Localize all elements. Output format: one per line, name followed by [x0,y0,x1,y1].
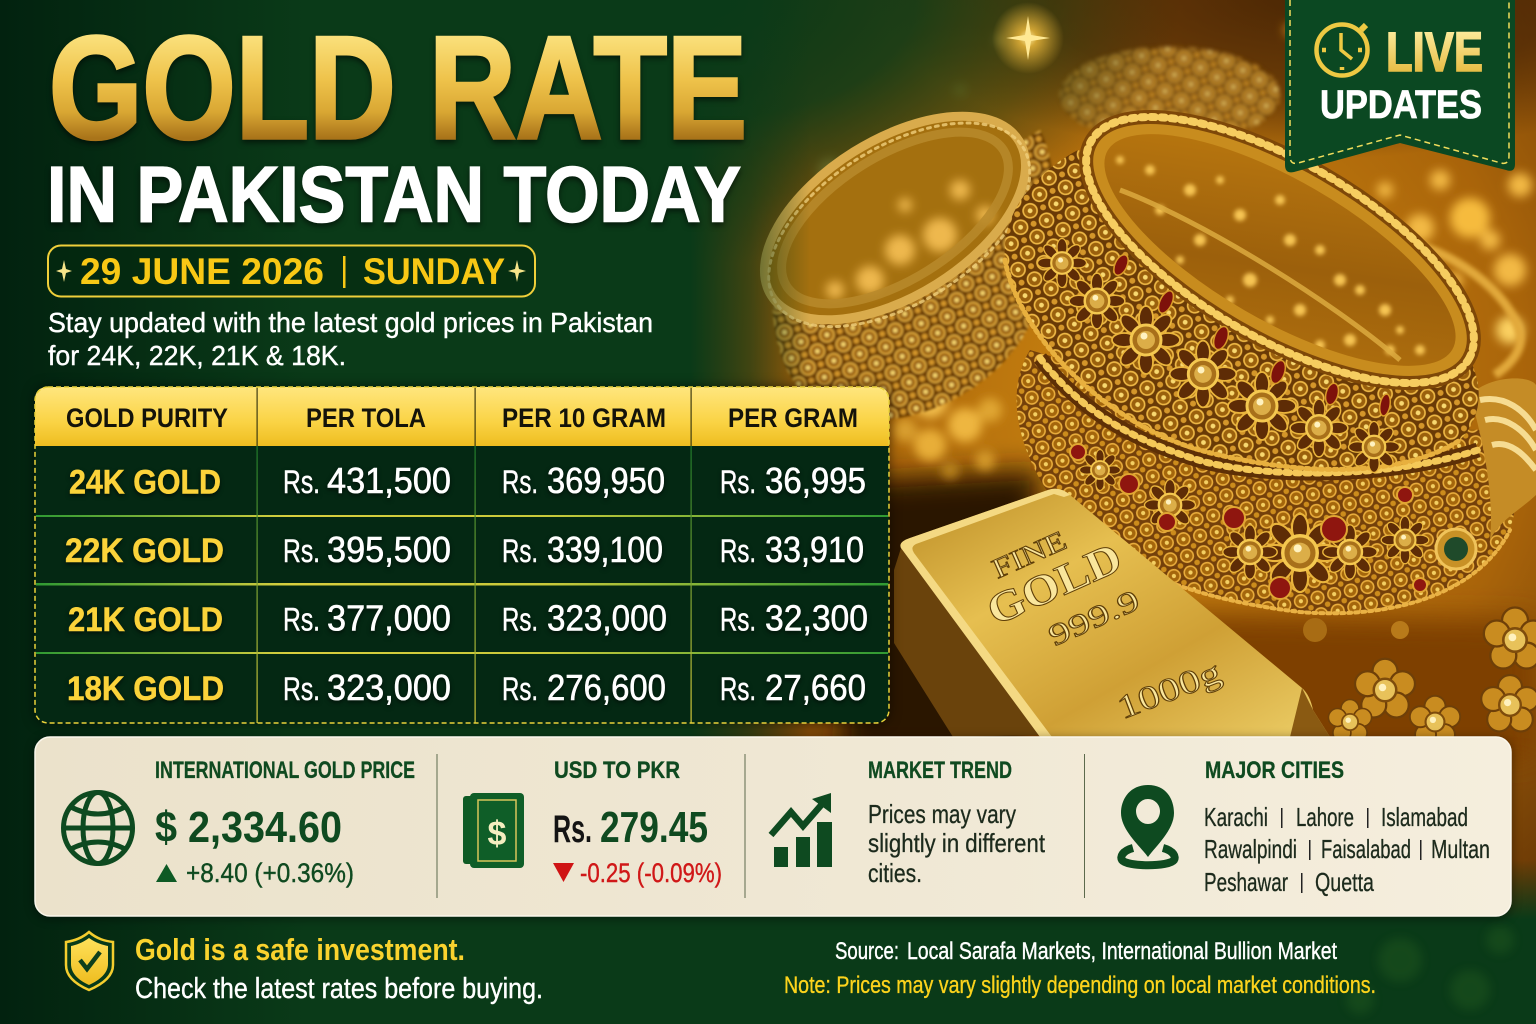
row: 24K: 431,500 [327,460,451,501]
row: 21K: 21K GOLD [68,601,223,639]
rate [553,803,708,852]
footer message [135,932,543,1005]
header labels: GOLD PURITY [66,403,228,433]
date text: 29 JUNE 2026 [80,251,324,292]
panel background [35,737,1511,916]
heading: MAJOR CITIES [1205,757,1344,784]
icon: safety shield [66,932,113,990]
section: market trend [771,757,1046,888]
bar engraving: FINE [988,525,1071,585]
intro text [48,307,653,371]
row: 21K: Rs. [502,602,538,638]
row: 21K: Rs. [720,602,756,638]
bar engraving: GOLD [980,534,1129,635]
right clasp [1470,378,1536,540]
description: Prices may vary [868,799,1016,829]
row: 22K: Rs. [720,533,756,569]
description [868,799,1046,888]
intro text: Stay updated with the latest gold prices in Pakistan [48,307,653,338]
source line: Local Sarafa Markets, International Bullion Market [907,938,1337,965]
back bangle [730,74,1064,420]
LIVE: LIVE [1386,20,1483,83]
city list: Lahore [1296,802,1354,832]
row: 22K [65,529,864,570]
lower bangle far rim [1400,240,1520,375]
table body [35,387,889,723]
row: 18K: 276,600 [547,667,666,708]
price: $ 2,334.60 [155,803,342,852]
heading: INTERNATIONAL GOLD PRICE [155,757,415,784]
city list: Karachi [1204,802,1268,832]
header labels: PER TOLA [306,403,426,433]
row: 22K: 339,100 [547,529,663,570]
sparkle right [508,260,526,282]
row: 22K: Rs. [283,533,320,569]
icon: globe [64,792,132,864]
row: 21K: 323,000 [547,598,667,638]
description: slightly in different [868,828,1046,858]
date badge [48,246,535,296]
city list [1204,802,1490,897]
dark surface under the jewellery [840,470,1040,760]
row: 18K: Rs. [720,671,756,707]
row: 22K: 33,910 [765,529,864,570]
row: 22K: 22K GOLD [65,532,224,570]
icon: map pin [1121,785,1175,865]
ribbon stitching [1290,0,1509,163]
city list: Quetta [1315,867,1374,897]
front bangle with floral filigree [1005,65,1513,472]
row: 18K: Rs. [502,671,538,707]
weekday text: SUNDAY [363,251,505,292]
subtitle: IN PAKISTAN TODAY: IN PAKISTAN TODAY [47,150,741,238]
section: international gold price [64,757,415,888]
icon: dollar note: $ [488,815,507,853]
row: 21K: 377,000 [327,598,451,638]
necklace behind the bangles [1060,47,1280,143]
footer message: Gold is a safe investment. [135,932,465,967]
header labels: PER GRAM [728,403,858,433]
change: +8.40 (+0.36%) [186,858,354,888]
icon: stopwatch [1316,24,1368,76]
section: major cities [1121,757,1490,897]
bar engraving: 1000g [1113,655,1226,727]
live updates ribbon [1285,0,1515,172]
footer fade [690,860,1536,930]
row: 24K [69,460,866,502]
row: 18K [67,667,866,708]
rate: 279.45 [600,803,708,852]
UPDATES: UPDATES [1320,83,1482,127]
sparkle [992,2,1064,74]
city list: Faisalabad [1321,834,1411,864]
heading: USD TO PKR [554,757,680,784]
gold bar [894,489,1330,737]
table header band [35,387,889,446]
photo: gold bangles and gold bar on warm bokeh [690,0,1536,925]
header labels [66,403,858,433]
city list: Peshawar [1204,867,1288,897]
city list: Rawalpindi [1204,834,1297,864]
footer message: Check the latest rates before buying. [135,973,543,1005]
change: -0.25 (-0.09%) [580,858,722,888]
row: 18K: 27,660 [765,667,866,708]
price table [35,387,889,723]
row: 21K [68,598,868,639]
photo base [690,0,1536,925]
bar engraving: 999.9 [1044,584,1145,653]
gold coins bottom right [1303,608,1536,745]
bar engraving [980,525,1226,727]
title: GOLD RATE: GOLD RATE [49,6,747,169]
row: 22K: 395,500 [327,529,451,570]
footer faint bokeh [1346,926,1514,1014]
green fade at the photo's top-left, behind the bangles [690,0,1190,270]
source line: Source: [835,938,899,965]
row: 24K: Rs. [283,464,320,500]
sparkle left [56,260,72,282]
heading: MARKET TREND [868,757,1012,784]
bokeh lights [782,24,1532,479]
ribbon shape [1285,0,1515,172]
rate: Rs. [553,808,592,851]
column separators [256,446,692,723]
icon: dollar note [463,793,524,868]
row: 22K: Rs. [502,533,538,569]
description: cities. [868,858,922,888]
green fade over the photo's left side [690,0,810,925]
row: 18K: Rs. [283,671,320,707]
row: 24K: 36,995 [765,460,866,501]
header labels: PER 10 GRAM [502,403,666,433]
row: 21K: Rs. [283,602,320,638]
icon: rising bars [771,793,832,867]
section: USD to PKR [463,757,722,888]
city list: Islamabad [1381,802,1468,832]
row: 18K: 323,000 [327,667,451,708]
row: 21K: 32,300 [765,598,868,638]
row: 18K: 18K GOLD [67,670,224,708]
row: 24K: 369,950 [547,460,665,501]
row: 24K: Rs. [720,464,756,500]
city list: Multan [1431,834,1490,864]
note line: Note: Prices may vary slightly depending on local market conditions. [784,972,1376,999]
row: 24K: 24K GOLD [69,464,221,502]
row: 24K: Rs. [502,464,538,500]
row separators [36,515,888,654]
intro text: for 24K, 22K, 21K & 18K. [48,340,346,371]
lower bangle with red stones [1017,350,1515,613]
dark top edge of photo [880,0,1536,170]
info panel [35,737,1511,916]
table dashed border [35,387,889,723]
